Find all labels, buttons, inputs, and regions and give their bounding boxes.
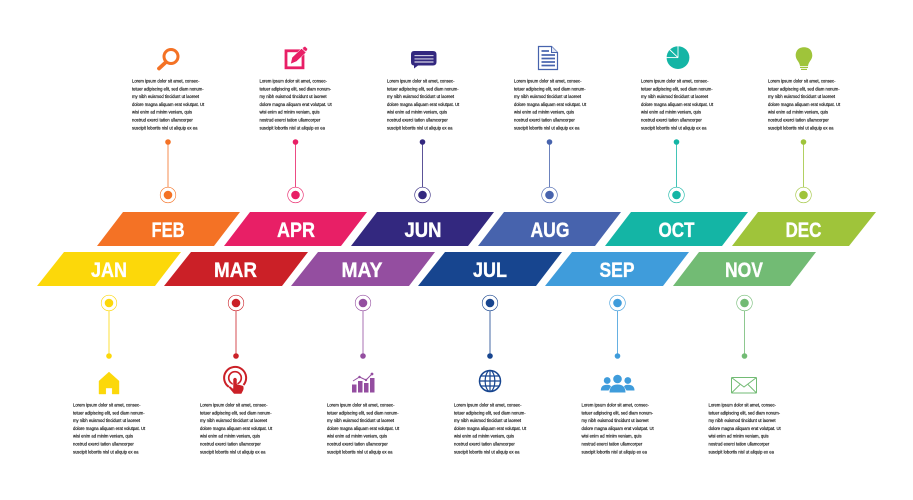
icon: document bbox=[538, 46, 558, 70]
text block: JAN: wisi enim ad minim veniam, quis bbox=[73, 434, 133, 439]
text block: JUN: suscipit lobortis nisl ut aliquip ex ea bbox=[387, 125, 453, 130]
text block: MAR: wisi enim ad minim veniam, quis bbox=[200, 434, 260, 439]
month band: SEP: SEP bbox=[600, 259, 634, 282]
month band: JUN: JUN bbox=[404, 219, 442, 242]
text block: AUG: dolore magna aliquam erat volutpat. Ut bbox=[514, 102, 587, 107]
text block: APR: Lorem ipsum dolor sit amet, consec- bbox=[260, 78, 328, 84]
text block: MAY: my nibh euismod tincidunt ut laoreet bbox=[327, 418, 395, 423]
text block: JUN: tetuer adipiscing elit, sed diam nonum- bbox=[387, 86, 459, 91]
text block: APR: tetuer adipiscing elit, sed diam nonum- bbox=[260, 86, 332, 91]
icon: magnifying glass bbox=[159, 50, 178, 68]
month band: NOV bbox=[673, 252, 816, 286]
icon: pie chart bbox=[666, 45, 689, 69]
text block: MAR: dolore magna aliquam erat volutpat. Ut bbox=[200, 426, 273, 431]
text block: NOV: nostrud exerci tation ullamcorper bbox=[708, 442, 770, 446]
text block: DEC: my nibh euismod tincidunt ut laoreet bbox=[768, 94, 836, 99]
month band: MAY bbox=[291, 252, 435, 286]
connector: AUG bbox=[542, 139, 557, 203]
text block: DEC: suscipit lobortis nisl ut aliquip ex ea bbox=[768, 125, 834, 130]
text block: OCT: tetuer adipiscing elit, sed diam nonum- bbox=[641, 86, 713, 91]
month band: FEB bbox=[97, 212, 240, 246]
text block: MAY: nostrud exerci tation ullamcorper bbox=[327, 442, 388, 446]
connector: MAR bbox=[228, 295, 244, 359]
text block: SEP: my nibh euismod tincidunt ut laoreet bbox=[582, 418, 649, 423]
text block: JAN bbox=[73, 402, 146, 454]
text block: AUG bbox=[514, 78, 587, 130]
month band: JUL bbox=[418, 252, 562, 286]
text block: OCT: Lorem ipsum dolor sit amet, consec- bbox=[641, 78, 709, 84]
icon: globe bbox=[480, 370, 500, 392]
text block: APR: my nibh euismod tincidunt ut laoreet bbox=[260, 94, 327, 99]
text block: JAN: Lorem ipsum dolor sit amet, consec- bbox=[73, 402, 141, 408]
text block: OCT: dolore magna aliquam erat volutpat. Ut bbox=[641, 102, 714, 107]
text block: NOV: suscipit lobortis nisl ut aliquip ex ea bbox=[708, 449, 775, 454]
text block: AUG: Lorem ipsum dolor sit amet, consec- bbox=[514, 78, 582, 84]
text block: JAN: nostrud exerci tation ullamcorper bbox=[73, 442, 134, 446]
text block: NOV: dolore magna aliquam erat volutpat. Ut bbox=[708, 426, 781, 431]
month band: MAR: MAR bbox=[214, 259, 257, 282]
text block: JAN: suscipit lobortis nisl ut aliquip ex ea bbox=[73, 449, 139, 454]
text block: NOV bbox=[708, 402, 781, 454]
text block: MAR: suscipit lobortis nisl ut aliquip ex ea bbox=[200, 449, 266, 454]
text block: JAN: dolore magna aliquam erat volutpat. Ut bbox=[73, 426, 146, 431]
connector: MAY bbox=[355, 295, 371, 359]
text block: JUL: nostrud exerci tation ullamcorper bbox=[454, 442, 515, 446]
text block: DEC: wisi enim ad minim veniam, quis bbox=[768, 110, 828, 115]
text block: JAN: tetuer adipiscing elit, sed diam nonum- bbox=[73, 410, 145, 415]
text block: JAN: my nibh euismod tincidunt ut laoreet bbox=[73, 418, 141, 423]
text block: FEB: wisi enim ad minim veniam, quis bbox=[132, 110, 192, 115]
text block: MAY: suscipit lobortis nisl ut aliquip ex ea bbox=[327, 449, 393, 454]
icon: speech bubble bbox=[411, 51, 436, 68]
text block: MAY: tetuer adipiscing elit, sed diam nonum- bbox=[327, 410, 399, 415]
text block: AUG: tetuer adipiscing elit, sed diam nonum- bbox=[514, 86, 586, 91]
text block: OCT: my nibh euismod tincidunt ut laoreet bbox=[641, 94, 709, 99]
text block: OCT bbox=[641, 78, 714, 130]
text block: OCT: nostrud exerci tation ullamcorper bbox=[641, 118, 702, 122]
text block: SEP: dolore magna aliquam erat volutpat. Ut bbox=[582, 426, 654, 431]
text block: AUG: wisi enim ad minim veniam, quis bbox=[514, 110, 574, 115]
text block: MAY bbox=[327, 402, 400, 454]
text block: MAY: dolore magna aliquam erat volutpat. Ut bbox=[327, 426, 400, 431]
text block: APR: wisi enim ad minim veniam, quis bbox=[260, 110, 320, 115]
text block: OCT: wisi enim ad minim veniam, quis bbox=[641, 110, 701, 115]
connector: JAN bbox=[101, 295, 117, 359]
text block: MAY: Lorem ipsum dolor sit amet, consec- bbox=[327, 402, 395, 408]
month band: AUG: AUG bbox=[530, 219, 570, 242]
text block: FEB: nostrud exerci tation ullamcorper bbox=[132, 118, 193, 122]
connector: DEC bbox=[796, 139, 811, 203]
text block: MAR bbox=[200, 402, 273, 454]
text block: JUN: nostrud exerci tation ullamcorper bbox=[387, 118, 448, 122]
connector: SEP bbox=[610, 295, 625, 359]
text block: DEC: tetuer adipiscing elit, sed diam nonum- bbox=[768, 86, 840, 91]
month band: APR bbox=[224, 212, 367, 246]
text block: NOV: tetuer adipiscing elit, sed diam nonum- bbox=[708, 410, 781, 415]
text block: JUN: Lorem ipsum dolor sit amet, consec- bbox=[387, 78, 455, 84]
month band: OCT bbox=[605, 212, 748, 246]
connector: APR bbox=[288, 139, 303, 203]
connector: JUN bbox=[415, 139, 430, 203]
text block: FEB: Lorem ipsum dolor sit amet, consec- bbox=[132, 78, 200, 84]
month band: JAN bbox=[37, 252, 181, 286]
icon: edit note bbox=[286, 46, 308, 68]
text block: JUN bbox=[387, 78, 460, 130]
text block: JUL: suscipit lobortis nisl ut aliquip ex ea bbox=[454, 449, 520, 454]
text block: SEP: wisi enim ad minim veniam, quis bbox=[582, 434, 642, 439]
month band: JUL: JUL bbox=[473, 259, 507, 282]
icon: house bbox=[99, 372, 119, 394]
text block: APR: nostrud exerci tation ullamcorper bbox=[260, 118, 321, 122]
text block: MAY: wisi enim ad minim veniam, quis bbox=[327, 434, 387, 439]
text block: DEC bbox=[768, 78, 841, 130]
connector: FEB bbox=[160, 139, 176, 203]
connector: NOV bbox=[737, 295, 752, 359]
text block: SEP: Lorem ipsum dolor sit amet, consec- bbox=[582, 402, 650, 408]
text block: JUN: dolore magna aliquam erat volutpat. Ut bbox=[387, 102, 460, 107]
text block: APR bbox=[260, 78, 332, 130]
text block: FEB: dolore magna aliquam erat volutpat. Ut bbox=[132, 102, 205, 107]
text block: AUG: my nibh euismod tincidunt ut laoreet bbox=[514, 94, 582, 99]
icon: envelope bbox=[732, 378, 756, 393]
text block: FEB: my nibh euismod tincidunt ut laoreet bbox=[132, 94, 200, 99]
text block: SEP: tetuer adipiscing elit, sed diam nonum- bbox=[582, 410, 654, 415]
text block: SEP: suscipit lobortis nisl ut aliquip ex ea bbox=[582, 449, 648, 454]
text block: JUL: dolore magna aliquam erat volutpat. Ut bbox=[454, 426, 527, 431]
text block: JUL: Lorem ipsum dolor sit amet, consec- bbox=[454, 402, 522, 408]
icon: people group bbox=[601, 375, 634, 392]
month band: DEC bbox=[732, 212, 876, 246]
month band: JAN: JAN bbox=[91, 259, 127, 282]
text block: MAR: Lorem ipsum dolor sit amet, consec- bbox=[200, 402, 268, 408]
text block: JUN: my nibh euismod tincidunt ut laoreet bbox=[387, 94, 455, 99]
connector: OCT bbox=[669, 139, 684, 203]
text block: MAR: my nibh euismod tincidunt ut laoreet bbox=[200, 418, 268, 423]
month band: AUG bbox=[478, 212, 621, 246]
text block: AUG: suscipit lobortis nisl ut aliquip ex ea bbox=[514, 125, 580, 130]
text block: DEC: nostrud exerci tation ullamcorper bbox=[768, 118, 829, 122]
text block: JUL: my nibh euismod tincidunt ut laoreet bbox=[454, 418, 522, 423]
text block: JUL: tetuer adipiscing elit, sed diam nonum- bbox=[454, 410, 526, 415]
month band: OCT: OCT bbox=[658, 219, 695, 242]
text block: JUL bbox=[454, 402, 527, 454]
text block: SEP bbox=[582, 402, 654, 454]
text block: NOV: my nibh euismod tincidunt ut laoreet bbox=[708, 418, 776, 423]
month band: MAR bbox=[164, 252, 308, 286]
icon: light bulb bbox=[796, 47, 812, 70]
month band: FEB: FEB bbox=[152, 219, 184, 242]
text block: MAR: tetuer adipiscing elit, sed diam nonum- bbox=[200, 410, 272, 415]
month band: MAY: MAY bbox=[342, 259, 382, 282]
text block: JUN: wisi enim ad minim veniam, quis bbox=[387, 110, 447, 115]
text block: APR: suscipit lobortis nisl ut aliquip ex ea bbox=[260, 125, 326, 130]
icon: growth chart bbox=[352, 373, 374, 392]
icon: touch target bbox=[224, 367, 246, 394]
month band: APR: APR bbox=[277, 219, 315, 242]
text block: NOV: wisi enim ad minim veniam, quis bbox=[708, 434, 769, 439]
text block: FEB: suscipit lobortis nisl ut aliquip ex ea bbox=[132, 125, 198, 130]
text block: APR: dolore magna aliquam erat volutpat. Ut bbox=[260, 102, 332, 107]
text block: FEB: tetuer adipiscing elit, sed diam nonum- bbox=[132, 86, 204, 91]
text block: MAR: nostrud exerci tation ullamcorper bbox=[200, 442, 261, 446]
text block: DEC: dolore magna aliquam erat volutpat. Ut bbox=[768, 102, 841, 107]
text block: FEB bbox=[132, 78, 205, 130]
text block: NOV: Lorem ipsum dolor sit amet, consec- bbox=[708, 402, 777, 408]
text block: OCT: suscipit lobortis nisl ut aliquip ex ea bbox=[641, 125, 707, 130]
month band: DEC: DEC bbox=[786, 219, 822, 242]
text block: AUG: nostrud exerci tation ullamcorper bbox=[514, 118, 575, 122]
month band: NOV: NOV bbox=[725, 259, 763, 282]
month band: JUN bbox=[351, 212, 494, 246]
month band: SEP bbox=[545, 252, 689, 286]
text block: SEP: nostrud exerci tation ullamcorper bbox=[582, 442, 643, 446]
connector: JUL bbox=[482, 295, 498, 359]
text block: JUL: wisi enim ad minim veniam, quis bbox=[454, 434, 514, 439]
text block: DEC: Lorem ipsum dolor sit amet, consec- bbox=[768, 78, 836, 84]
